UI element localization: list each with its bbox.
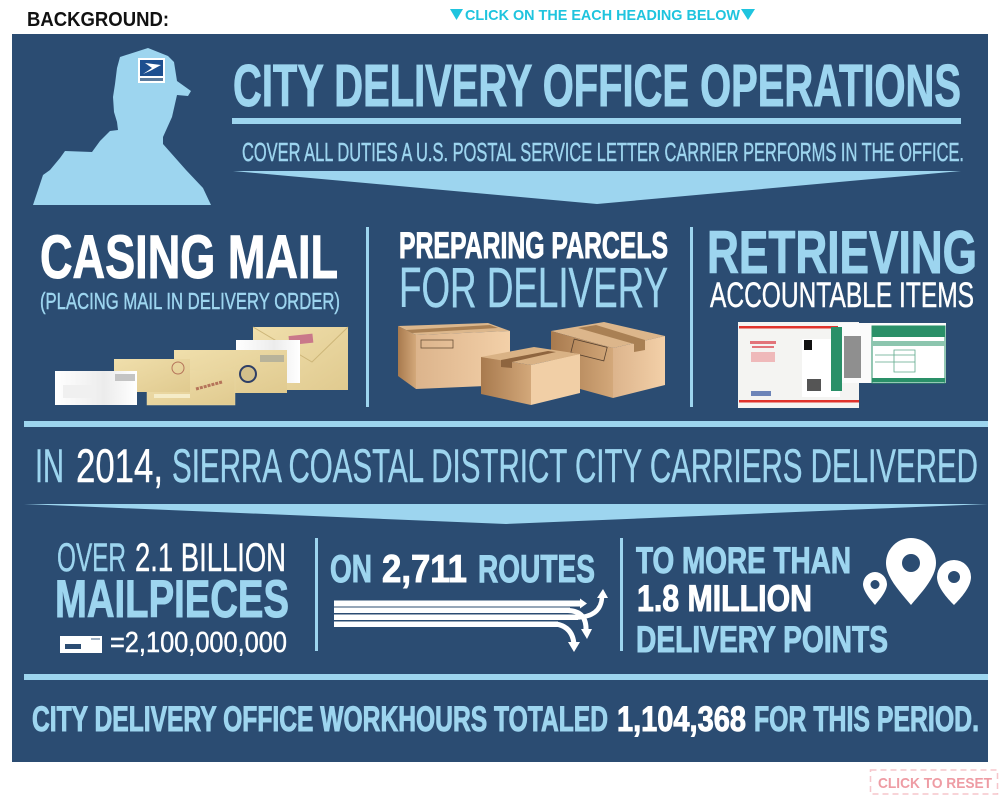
stat: routes: ROUTES	[478, 548, 595, 591]
heading: 2014 delivery statement: 2014,	[76, 439, 163, 492]
arrow: wide downward wedge	[24, 504, 988, 524]
stat: mailpieces: =2,100,000,000	[110, 627, 287, 659]
icon: branching route arrows	[334, 589, 608, 652]
instruction: click on each heading: CLICK ON THE EACH HEADING BELOW	[465, 7, 741, 24]
divider	[620, 538, 623, 651]
section: casing mail: (PLACING MAIL IN DELIVERY ORDER)	[40, 288, 340, 314]
icon: envelopes	[55, 327, 348, 405]
stat: routes: 2,711	[382, 548, 467, 591]
stat: delivery points	[636, 540, 888, 660]
stat: delivery points: DELIVERY POINTS	[636, 619, 888, 660]
button: click to reset: CLICK TO RESET	[878, 775, 992, 792]
section: retrieving accountable items	[707, 219, 977, 315]
divider	[366, 227, 369, 407]
stat: mailpieces: 2.1 BILLION	[135, 536, 286, 580]
heading: background: BACKGROUND:	[27, 9, 169, 31]
stat: mailpieces	[55, 536, 289, 659]
heading: 2014 delivery statement: IN	[35, 439, 64, 492]
section: casing mail	[40, 223, 340, 314]
stat: mailpieces: OVER	[57, 536, 126, 580]
icon: map pins	[863, 538, 971, 605]
stat: mailpieces: MAILPIECES	[55, 570, 289, 629]
section: preparing parcels: FOR DELIVERY	[399, 256, 668, 320]
stat: routes	[330, 548, 608, 652]
footer statement: workhours: 1,104,368	[617, 700, 746, 739]
stat: delivery points: TO MORE THAN	[636, 540, 851, 581]
icon: letter carrier silhouette	[33, 48, 211, 205]
footer statement: workhours: CITY DELIVERY OFFICE WORKHOURS TOTALED	[32, 700, 608, 739]
divider band	[24, 421, 988, 427]
section: preparing parcels	[399, 225, 668, 320]
section: preparing parcels: PREPARING PARCELS	[399, 225, 668, 266]
section: casing mail: CASING MAIL	[40, 223, 338, 291]
icon: envelope	[60, 636, 102, 653]
divider band	[24, 674, 988, 680]
divider	[315, 538, 318, 651]
icon: parcels	[398, 322, 665, 405]
title rule	[232, 118, 961, 124]
divider	[690, 227, 693, 407]
button: click to reset	[870, 770, 998, 794]
icon: accountable mail forms	[738, 322, 946, 408]
stat: routes: ON	[330, 548, 372, 591]
stat: delivery points: 1.8 MILLION	[637, 578, 812, 619]
arrow: downward wedge under subtitle	[233, 171, 961, 204]
